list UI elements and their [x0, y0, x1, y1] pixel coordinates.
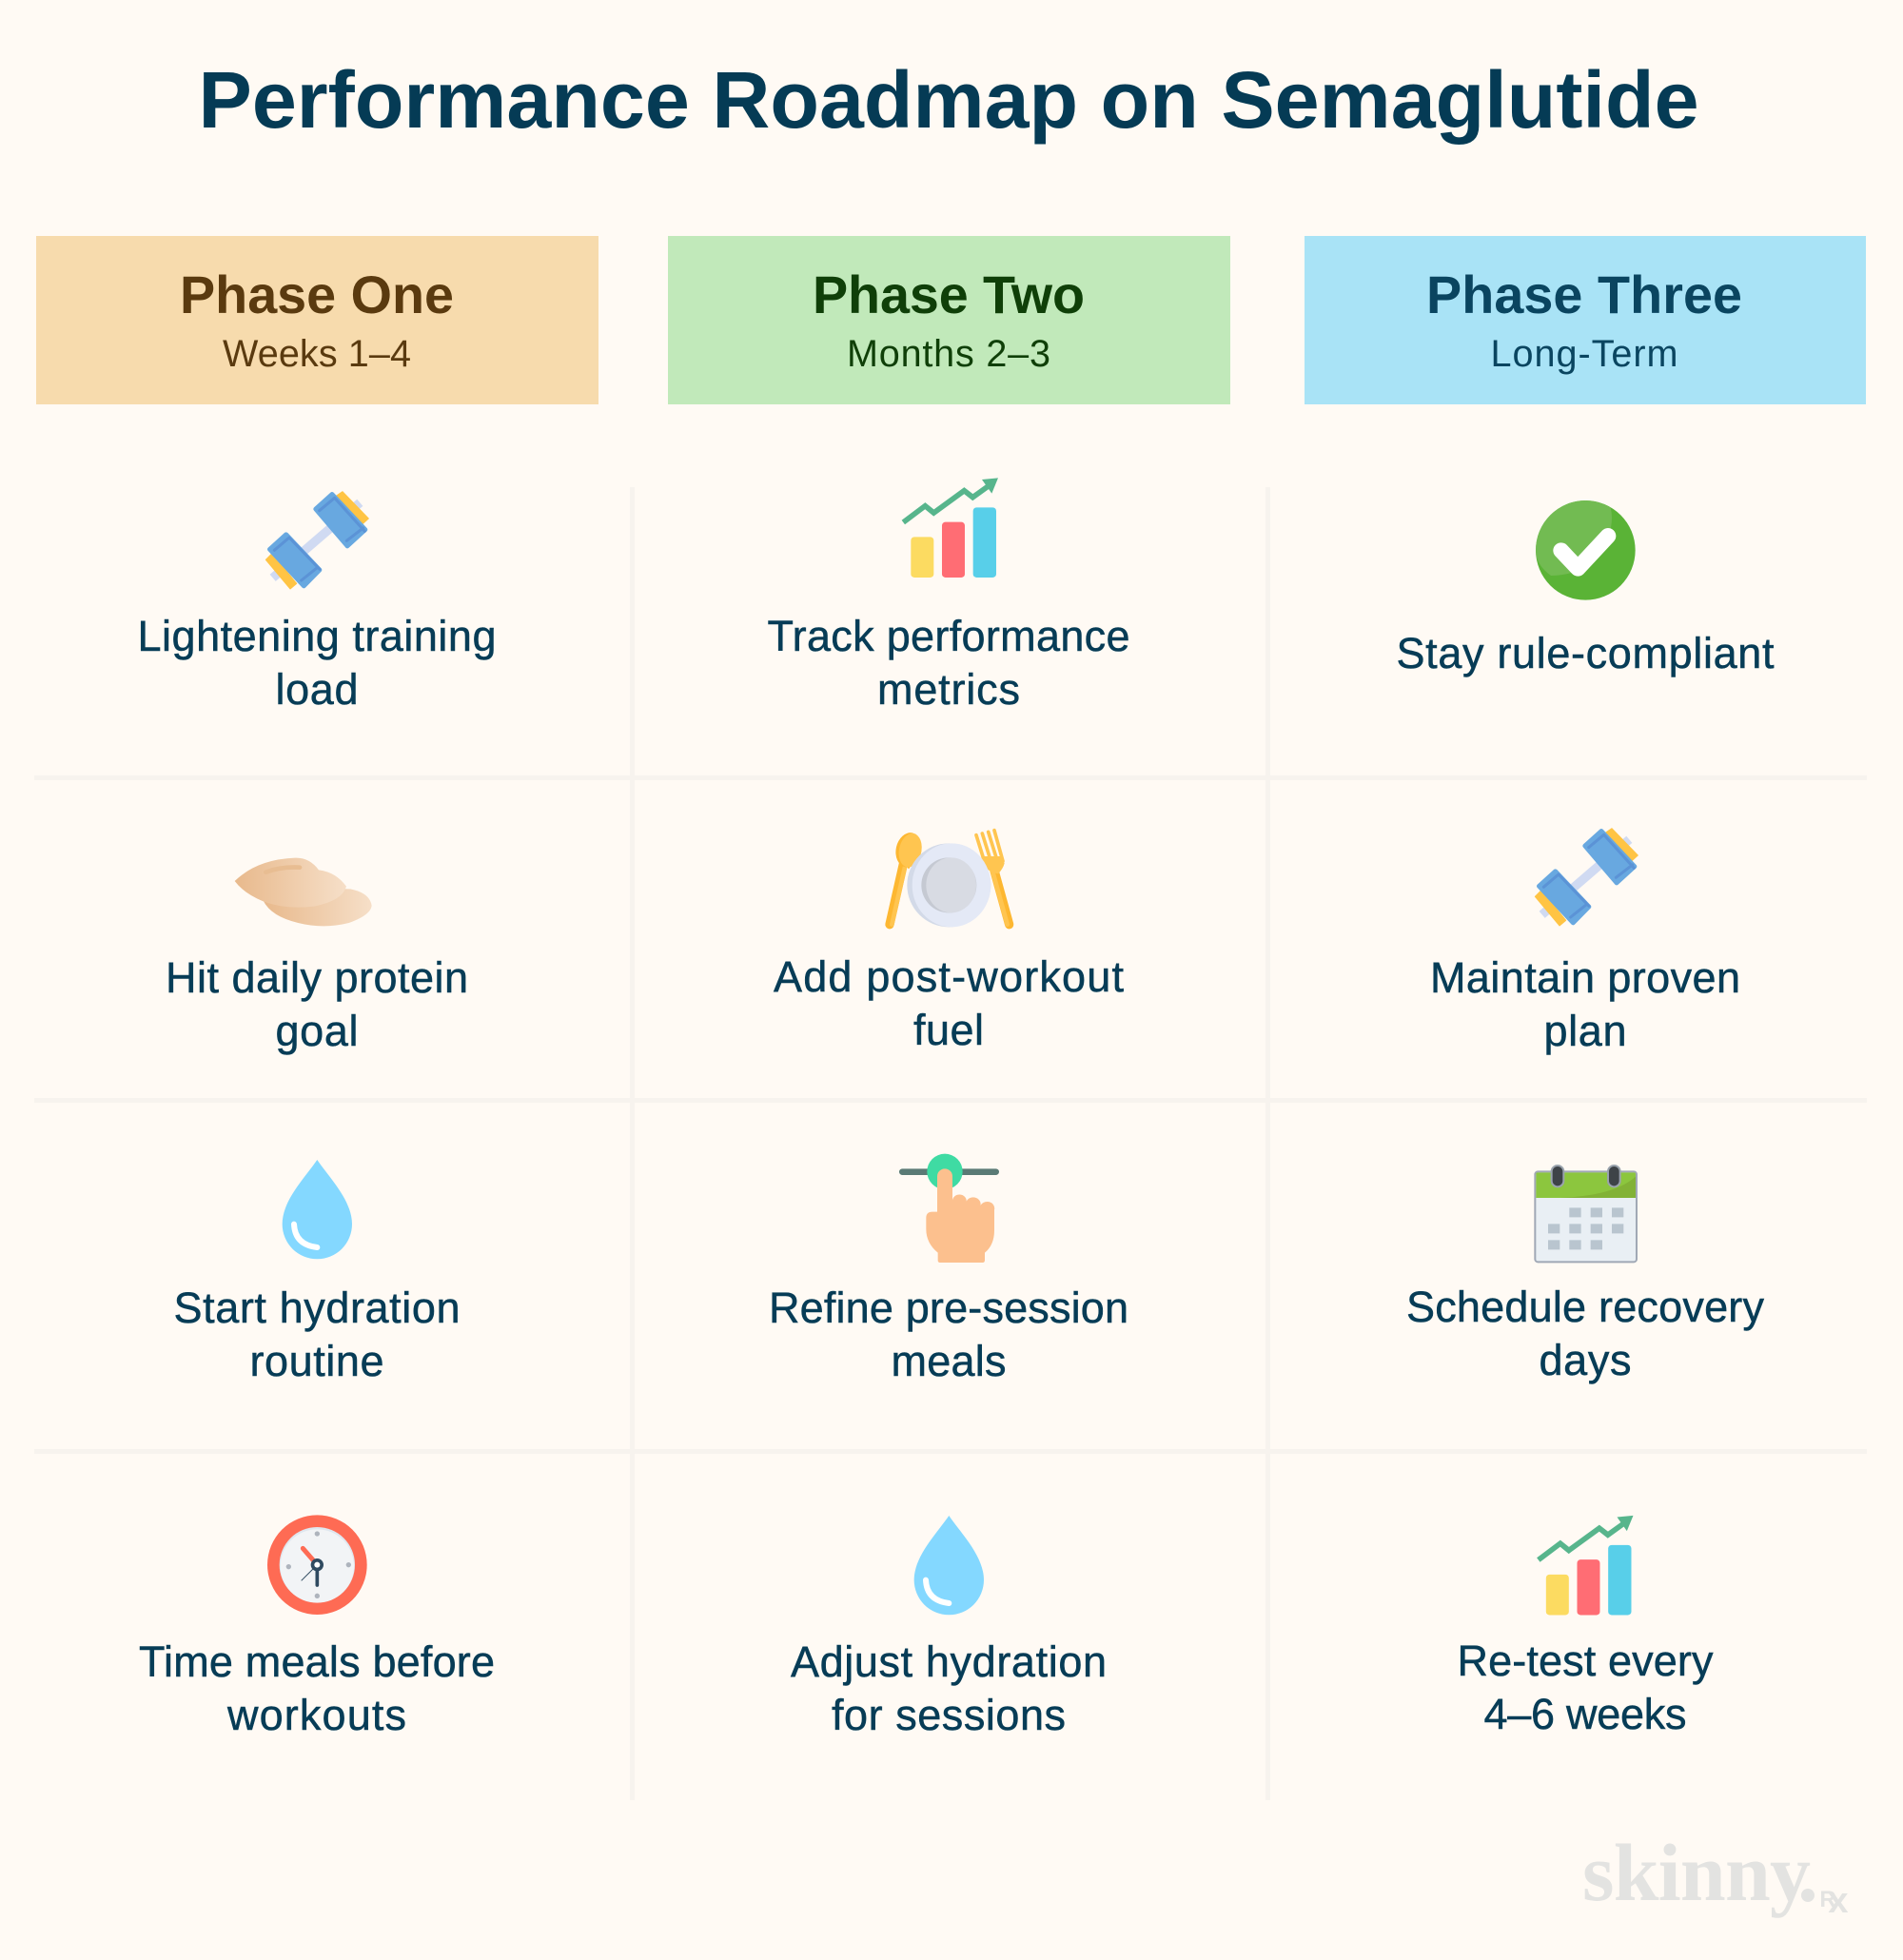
text: lightening training load: [137, 612, 497, 714]
panel: phase one header: Weeks 1–4: [223, 333, 411, 375]
panel: phase one header: Phase One: [180, 265, 454, 324]
text: re-test every 4-6 weeks: 4–6 weeks: [1484, 1690, 1686, 1738]
text: schedule recovery days: days: [1540, 1336, 1631, 1384]
text: hit daily protein goal: goal: [276, 1007, 358, 1055]
text: add post-workout fuel: Add post-workout: [774, 952, 1124, 1001]
icon: dumbbell: [1535, 829, 1638, 926]
icon: dumbbell: [265, 492, 368, 589]
text: maintain proven plan: [1430, 953, 1740, 1055]
text: refine pre-session meals: Refine pre-session: [769, 1284, 1128, 1332]
icon: clock: [267, 1515, 367, 1615]
icon: plate and cutlery: [890, 831, 1010, 927]
text: adjust hydration for sessions: Adjust hydration: [791, 1637, 1107, 1686]
text: time meals before workouts: Time meals before: [139, 1637, 495, 1686]
text: refine pre-session meals: meals: [891, 1337, 1007, 1385]
logo: skinny rx: R: [1819, 1887, 1836, 1912]
text: hit daily protein goal: Hit daily protein: [166, 953, 468, 1002]
text: adjust hydration for sessions: for sessions: [832, 1691, 1066, 1739]
text: schedule recovery days: [1406, 1283, 1764, 1384]
text: schedule recovery days: Schedule recovery: [1406, 1283, 1764, 1331]
logo: skinny rx: skinny: [1582, 1827, 1811, 1918]
text: hit daily protein goal: [166, 953, 468, 1055]
icon: check mark: [1536, 500, 1636, 600]
icon: chicken breast: [235, 858, 372, 926]
text: lightening training load: Lightening training: [137, 612, 497, 660]
text: adjust hydration for sessions: [791, 1637, 1107, 1739]
logo: skinny rx: x: [1828, 1881, 1849, 1921]
panel: phase two header: [668, 236, 1230, 404]
text: track performance metrics: metrics: [877, 665, 1020, 714]
icon: water drop: [914, 1516, 984, 1615]
text: refine pre-session meals: [769, 1284, 1128, 1385]
text: track performance metrics: [767, 612, 1130, 714]
text: maintain proven plan: plan: [1543, 1007, 1627, 1055]
text: add post-workout fuel: fuel: [913, 1006, 984, 1054]
text: start hydration routine: routine: [249, 1337, 384, 1385]
icon: pointing hand on slider: [902, 1154, 996, 1263]
text: time meals before workouts: workouts: [226, 1691, 406, 1739]
panel: phase two header: Months 2–3: [847, 333, 1050, 375]
icon: calendar: [1535, 1166, 1637, 1262]
icon: performance chart: [903, 478, 998, 578]
icon: performance chart: [1539, 1516, 1633, 1615]
panel: phase one header: [36, 236, 598, 404]
text: start hydration routine: Start hydration: [173, 1284, 461, 1332]
title: Performance Roadmap on Semaglutide: [198, 55, 1699, 145]
text: start hydration routine: [173, 1284, 461, 1385]
panel: phase three header: Long-Term: [1490, 333, 1678, 375]
text: stay rule-compliant: Stay rule-compliant: [1397, 629, 1775, 677]
panel: phase two header: Phase Two: [813, 265, 1085, 324]
text: re-test every 4-6 weeks: [1458, 1637, 1714, 1738]
icon: water drop: [283, 1160, 352, 1259]
text: time meals before workouts: [139, 1637, 495, 1739]
text: lightening training load: load: [276, 665, 358, 714]
text: re-test every 4-6 weeks: Re-test every: [1458, 1637, 1714, 1685]
panel: phase three header: [1305, 236, 1866, 404]
panel: phase three header: Phase Three: [1426, 265, 1742, 324]
text: track performance metrics: Track performance: [767, 612, 1130, 660]
text: maintain proven plan: Maintain proven: [1430, 953, 1740, 1002]
text: add post-workout fuel: [774, 952, 1124, 1054]
